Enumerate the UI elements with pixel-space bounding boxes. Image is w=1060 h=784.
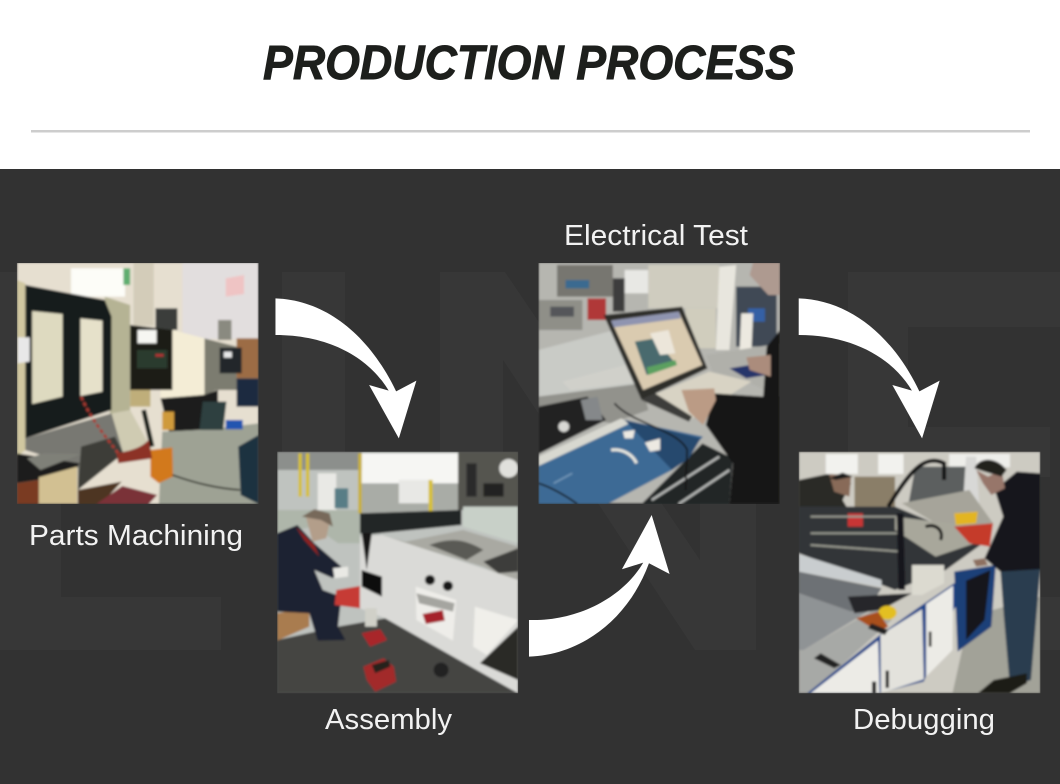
- label: assembly: Assembly: [325, 704, 453, 736]
- photo: electrical test: [538, 262, 780, 504]
- photo: assembly: [277, 452, 518, 693]
- arrow: machining to assembly: [275, 298, 416, 438]
- arrow: assembly to electrical test: [529, 515, 670, 657]
- title heading: PRODUCTION PROCESS: [263, 37, 795, 90]
- photo: parts machining: [17, 262, 259, 504]
- label: parts machining: Parts Machining: [29, 520, 243, 552]
- label: electrical test: Electrical Test: [564, 220, 748, 252]
- label: debugging: Debugging: [853, 704, 995, 736]
- panel: dark process band: [0, 169, 1060, 784]
- photo: debugging: [799, 452, 1040, 693]
- arrow: electrical test to debugging: [799, 298, 940, 438]
